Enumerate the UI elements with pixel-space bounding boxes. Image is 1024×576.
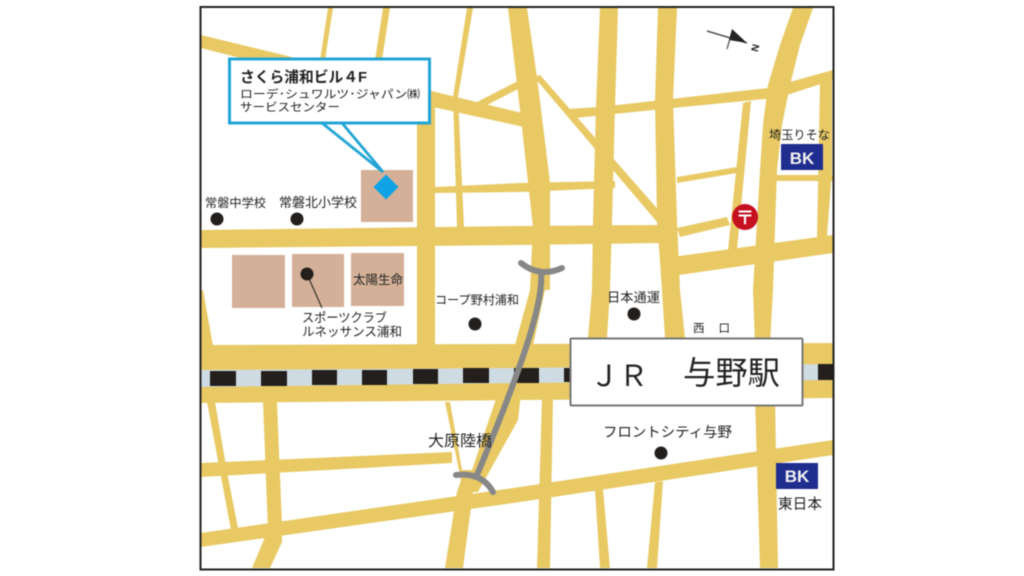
bank: 東日本: BK (785, 467, 810, 486)
bank: 東日本 (776, 463, 823, 513)
bank: 東日本: 東日本 (778, 496, 823, 513)
landmark: フロントシティ与野 (603, 424, 732, 460)
station sign (570, 338, 802, 406)
callout pointer (322, 123, 383, 172)
landmark: 常磐北小学校: 常磐北小学校 (279, 195, 357, 210)
callout: service center (230, 59, 430, 123)
icon: north arrow: N (748, 43, 761, 53)
icon: post office: 〒 (735, 208, 755, 229)
landmark: 常磐北小学校 (279, 195, 357, 226)
landmark: スポーツクラブ ルネッサンス浦和: スポーツクラブ (302, 310, 387, 325)
road network (201, 8, 834, 568)
label: 西口: 西 口 (693, 323, 730, 335)
bank: 埼玉りそな (769, 128, 830, 170)
map frame (200, 7, 834, 570)
station sign: Ｊ (590, 361, 619, 393)
icon: post office (732, 204, 758, 230)
icon: location diamond (374, 174, 398, 200)
landmark: コープ野村浦和: コープ野村浦和 (435, 293, 519, 307)
railway line (201, 364, 834, 387)
callout: service center: さくら浦和ビル４F (240, 68, 367, 86)
label: 太陽生命: 太陽生命 (353, 272, 403, 287)
landmark: スポーツクラブ ルネッサンス浦和: ルネッサンス浦和 (302, 325, 402, 339)
callout: service center: サービスセンター (240, 101, 340, 114)
callout: service center: ローデ･シュワルツ･ジャパン㈱ (240, 87, 421, 101)
icon: north arrow (707, 29, 761, 53)
station sign: 与野駅 (683, 355, 780, 391)
landmark: 日本通運 (607, 290, 660, 320)
landmark: スポーツクラブ ルネッサンス浦和 (300, 268, 402, 339)
station sign: Ｒ (619, 361, 648, 393)
overpass: 大原陸橋 (456, 263, 562, 492)
landmark: コープ野村浦和 (435, 293, 519, 330)
landmark: フロントシティ与野: フロントシティ与野 (603, 424, 732, 440)
label: 大原陸橋: 大原陸橋 (428, 432, 493, 450)
landmark: 日本通運: 日本通運 (607, 290, 660, 305)
bank: 埼玉りそな: BK (790, 149, 815, 168)
landmark: 常磐中学校 (205, 195, 266, 226)
landmark: 常磐中学校: 常磐中学校 (205, 195, 266, 210)
building blocks (232, 170, 413, 308)
map background (201, 7, 834, 569)
bank: 埼玉りそな: 埼玉りそな (769, 128, 830, 142)
